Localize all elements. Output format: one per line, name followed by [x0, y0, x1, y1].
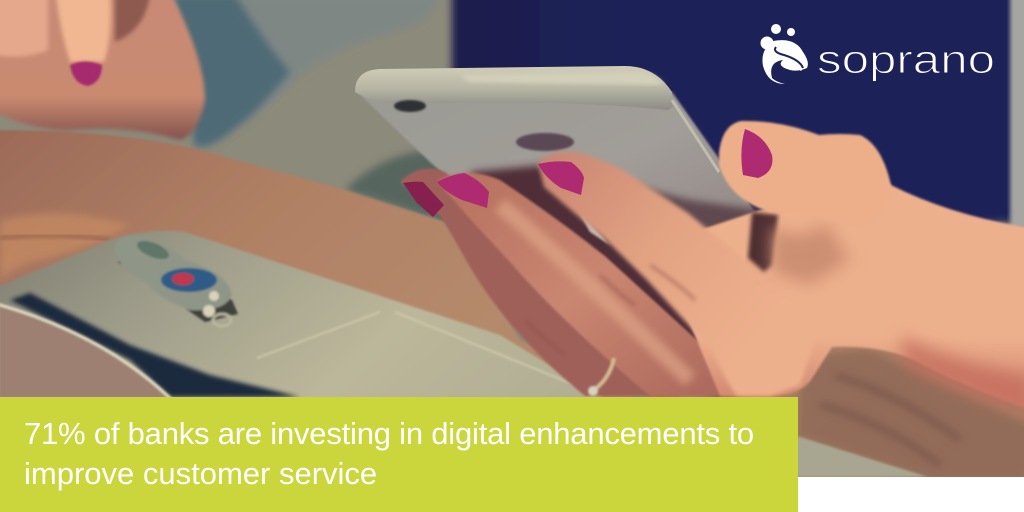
ring [588, 358, 614, 396]
logo wordmark: soprano [817, 38, 995, 82]
back of hand and wrist [680, 180, 1024, 410]
headline text [24, 416, 754, 491]
nails: right hand [403, 129, 772, 217]
hand shadow [470, 165, 740, 396]
middle finger highlight [500, 205, 690, 380]
crotch shadow [748, 212, 778, 272]
middle finger [437, 173, 745, 396]
upper left hand [0, 0, 205, 140]
wrist warm shade [900, 335, 1024, 412]
camera lens [394, 100, 426, 112]
laptop [0, 231, 928, 477]
laptop screen edge [0, 304, 172, 400]
apple logo [516, 133, 574, 151]
table: wood surface [0, 130, 1024, 480]
sleeve: grey shirt [170, 0, 440, 147]
logo: soprano [760, 24, 995, 84]
nail: upper left finger [70, 62, 102, 86]
phone underside shadow [610, 180, 765, 285]
key fob [115, 236, 238, 326]
thumb [719, 121, 891, 228]
logo mark [760, 24, 808, 84]
headline text: improve customer service [24, 456, 377, 491]
trackpad [257, 312, 600, 395]
smartphone [355, 66, 765, 285]
knuckle creases [525, 265, 695, 355]
sliver of phone between fingers [575, 205, 610, 245]
fingers [0, 0, 48, 57]
ring finger [400, 169, 680, 396]
headline text: 71% of banks are investing in digital enhancements to [24, 416, 754, 451]
index finger [538, 152, 815, 396]
keyboard [10, 293, 300, 397]
banner: green callout [0, 397, 798, 512]
